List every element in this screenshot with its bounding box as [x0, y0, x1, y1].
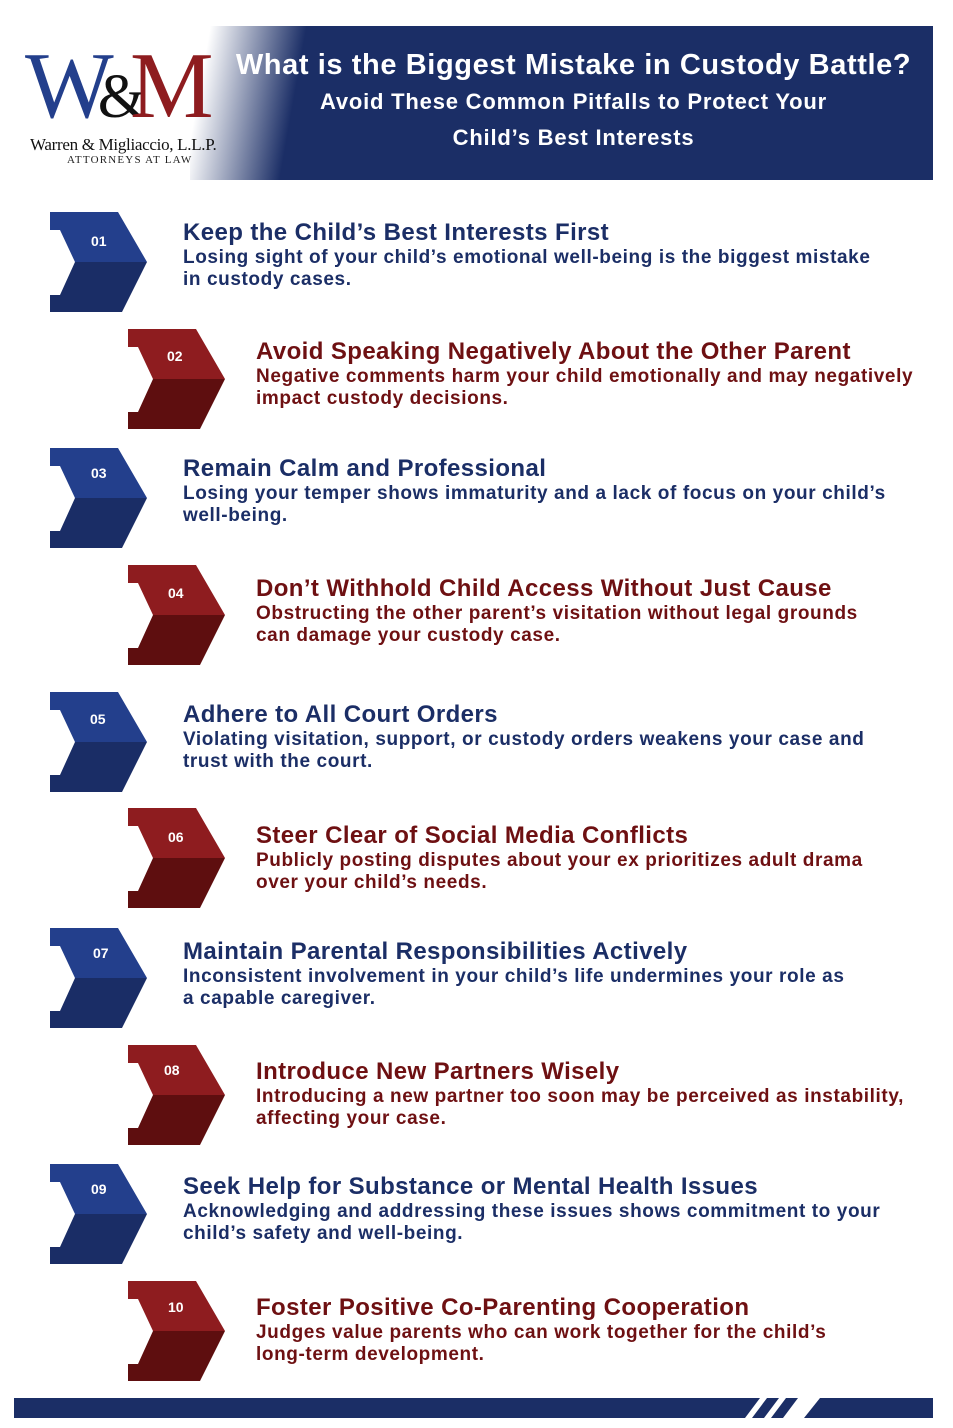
item 08: 08	[164, 1062, 180, 1078]
item 10: long-term development.	[256, 1344, 485, 1365]
item 05	[50, 692, 864, 792]
item 04: Don’t Withhold Child Access Without Just Cause	[256, 575, 832, 602]
logo: Warren & Migliaccio, L.L.P.	[30, 135, 216, 154]
item 05: Adhere to All Court Orders	[183, 701, 498, 728]
item 01	[50, 212, 871, 312]
header banner	[190, 26, 933, 180]
item 04	[128, 565, 858, 665]
item 06: over your child’s needs.	[256, 872, 487, 893]
item 09	[50, 1164, 880, 1264]
item 07	[50, 928, 845, 1028]
item 05: trust with the court.	[183, 751, 373, 772]
item 01: 01	[91, 233, 107, 249]
item 07: Inconsistent involvement in your child’s life undermines your role as	[183, 966, 845, 987]
title: Child’s Best Interests	[453, 125, 694, 150]
item 08: Introducing a new partner too soon may be perceived as instability,	[256, 1086, 904, 1107]
logo: ATTORNEYS AT LAW	[67, 154, 192, 166]
item 10: Foster Positive Co-Parenting Cooperation	[256, 1294, 749, 1321]
item 02: Avoid Speaking Negatively About the Other Parent	[256, 338, 851, 365]
item 01: Keep the Child’s Best Interests First	[183, 219, 609, 246]
item 07: a capable caregiver.	[183, 988, 376, 1009]
item 10	[128, 1281, 826, 1381]
item 04: can damage your custody case.	[256, 625, 561, 646]
footer bar	[14, 1398, 933, 1418]
item 06: 06	[168, 829, 184, 845]
item 05: 05	[90, 711, 106, 727]
item 07: Maintain Parental Responsibilities Actively	[183, 938, 687, 965]
item 08: affecting your case.	[256, 1108, 446, 1129]
item 06: Steer Clear of Social Media Conflicts	[256, 822, 688, 849]
item 02: Negative comments harm your child emotionally and may negatively	[256, 366, 913, 387]
item 02: 02	[167, 348, 183, 364]
item 08: Introduce New Partners Wisely	[256, 1058, 620, 1085]
item 03: Losing your temper shows immaturity and a lack of focus on your child’s	[183, 483, 886, 504]
item 06: Publicly posting disputes about your ex prioritizes adult drama	[256, 850, 863, 871]
item 09: Acknowledging and addressing these issues shows commitment to your	[183, 1201, 880, 1222]
item 03: Remain Calm and Professional	[183, 455, 546, 482]
item 03: well-being.	[183, 505, 288, 526]
item 02: impact custody decisions.	[256, 388, 509, 409]
item 01: in custody cases.	[183, 269, 352, 290]
item 04: Obstructing the other parent’s visitation without legal grounds	[256, 603, 858, 624]
item 09: 09	[91, 1181, 107, 1197]
item 06	[128, 808, 863, 908]
item 03: 03	[91, 465, 107, 481]
item 09: Seek Help for Substance or Mental Health Issues	[183, 1173, 758, 1200]
item 02	[128, 329, 913, 429]
item 03	[50, 448, 886, 548]
item 08	[128, 1045, 904, 1145]
title: What is the Biggest Mistake in Custody Battle?	[236, 49, 911, 81]
title: Avoid These Common Pitfalls to Protect Your	[320, 89, 827, 114]
title	[236, 49, 911, 150]
item 10: 10	[168, 1299, 184, 1315]
item 05: Violating visitation, support, or custody orders weakens your case and	[183, 729, 864, 750]
item 09: child’s safety and well-being.	[183, 1223, 463, 1244]
item 07: 07	[93, 945, 109, 961]
item 04: 04	[168, 585, 184, 601]
logo: W&M	[25, 34, 198, 138]
item 10: Judges value parents who can work together for the child’s	[256, 1322, 826, 1343]
item 01: Losing sight of your child’s emotional well-being is the biggest mistake	[183, 247, 871, 268]
